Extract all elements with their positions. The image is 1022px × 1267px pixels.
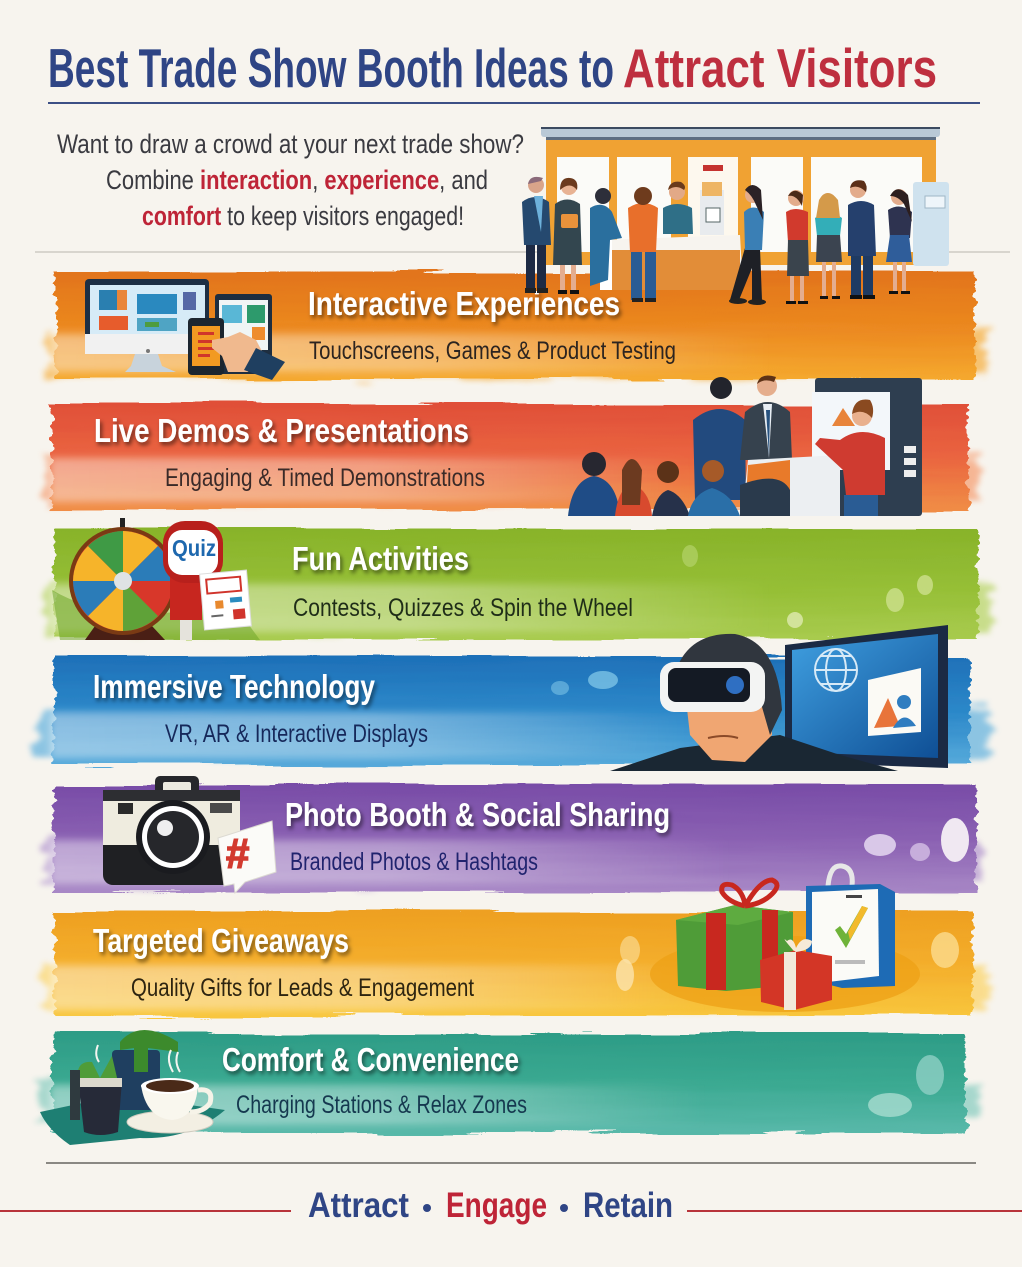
illustration: live demo presentation <box>568 376 922 516</box>
counter <box>600 235 743 290</box>
intro text: comfort to keep visitors engaged! <box>142 201 464 231</box>
panel: live demos <box>45 404 980 509</box>
illustration: trade show booth with visitors <box>522 127 949 305</box>
heading: comfort and convenience: Comfort & Convenience <box>222 1041 519 1078</box>
illustration: gifts and clipboard <box>650 866 920 1012</box>
subtext: photo booth: Branded Photos & Hashtags <box>290 848 538 876</box>
icon: hashtag speech bubble <box>218 821 276 893</box>
panel: interactive experiences <box>47 272 987 379</box>
person 6 <box>729 185 766 305</box>
heading: immersive technology: Immersive Technology <box>93 668 376 705</box>
panel: targeted giveaways <box>43 912 988 1016</box>
person 2 <box>553 178 582 294</box>
heading: targeted giveaways: Targeted Giveaways <box>93 922 349 959</box>
person 1 <box>522 177 551 293</box>
person 7 <box>786 190 809 304</box>
person 5 <box>663 182 693 234</box>
subtext: fun activities: Contests, Quizzes & Spin the Wheel <box>293 594 633 622</box>
panel: photo booth <box>46 784 981 892</box>
subtext: targeted giveaways: Quality Gifts for Leads & Engagement <box>131 974 474 1002</box>
intro text: Want to draw a crowd at your next trade show? <box>57 129 524 159</box>
heading: interactive experiences: Interactive Experiences <box>308 285 620 322</box>
subtext: immersive technology: VR, AR & Interactive Displays <box>165 720 428 748</box>
icon: monitor with tablet, phone and hand <box>85 279 285 380</box>
subtext: comfort and convenience: Charging Stations & Relax Zones <box>236 1091 527 1119</box>
footer tagline: Engage <box>446 1186 547 1225</box>
icon: hashtag speech bubble: # <box>226 830 249 877</box>
person 8 <box>815 193 842 299</box>
heading: photo booth: Photo Booth & Social Sharing <box>285 796 670 833</box>
right kiosk <box>913 182 949 266</box>
heading: live demos: Live Demos & Presentations <box>94 412 469 449</box>
title: Attract Visitors <box>623 37 937 99</box>
panel: comfort and convenience <box>40 1033 980 1132</box>
footer tagline <box>308 1186 673 1225</box>
person 4 <box>628 187 658 302</box>
icon: prize wheel and quiz sign <box>52 518 260 640</box>
person 9 <box>848 180 876 299</box>
icon: camera with hashtag bubble <box>103 776 276 893</box>
footer tagline: Attract <box>308 1186 409 1225</box>
subtext: interactive experiences: Touchscreens, Games & Product Testing <box>309 337 676 365</box>
heading: fun activities: Fun Activities <box>292 540 469 577</box>
footer tagline: Retain <box>583 1186 673 1225</box>
person 3 <box>590 188 622 286</box>
illustration: person in VR headset with display <box>610 625 948 771</box>
person 10 <box>886 189 912 294</box>
panel: immersive technology <box>38 657 990 765</box>
subtext: live demos: Engaging & Timed Demonstrations <box>165 464 485 492</box>
panel: fun activities <box>46 529 991 639</box>
title: Best Trade Show Booth Ideas to <box>48 37 614 99</box>
label: quiz: Quiz <box>172 535 216 561</box>
icon: coffee cup, plant and lamp <box>40 1030 225 1145</box>
intro text <box>57 129 524 231</box>
intro text: Combine interaction, experience, and <box>106 165 488 195</box>
